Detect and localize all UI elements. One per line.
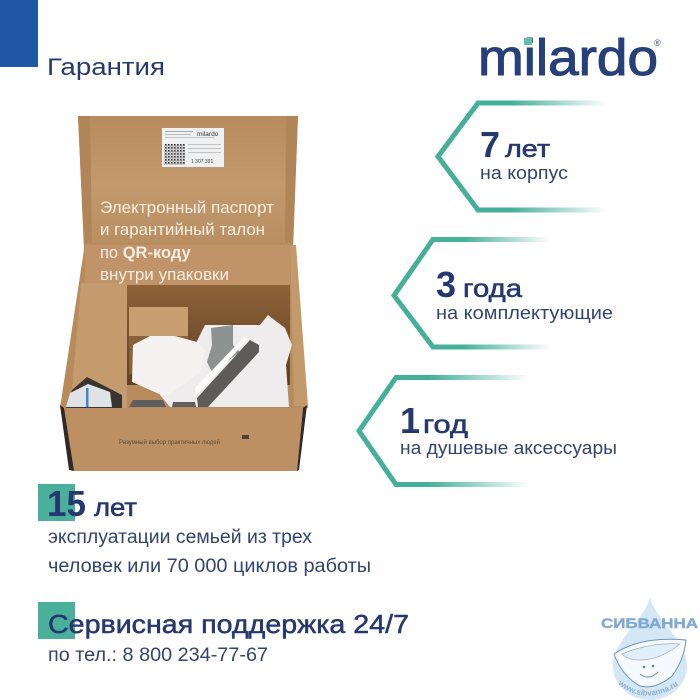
inner folded carton xyxy=(72,283,127,408)
warranty card: 7 years xyxy=(438,103,607,210)
box body xyxy=(60,243,308,471)
box caption: по QR-коду xyxy=(100,244,192,262)
description: на душевые аксессуары xyxy=(400,438,617,458)
description: на комплектующие xyxy=(436,303,613,323)
title: Гарантия xyxy=(47,54,165,81)
box front mark xyxy=(242,435,249,439)
chevron frame xyxy=(438,103,607,210)
watermark logo: Sibvanna xyxy=(601,598,698,700)
phone: по тел.: 8 800 234-77-67 xyxy=(48,645,268,666)
heading: 3 xyxy=(436,264,456,305)
QR label: 1 307 391 xyxy=(191,159,213,165)
heading number: 15 xyxy=(47,483,86,524)
chevron frame xyxy=(394,240,551,347)
white tissue paper xyxy=(160,315,292,407)
brand logo: milardo: milardo xyxy=(478,29,658,86)
box caption xyxy=(100,199,274,284)
brand name: СИБВАННА xyxy=(601,615,698,631)
box front printed text: Разумный выбор практичных людей xyxy=(119,439,220,446)
wrapped item at left xyxy=(66,384,112,407)
teal square xyxy=(38,602,75,639)
registered mark: ® xyxy=(654,38,661,48)
QR label xyxy=(162,128,224,167)
heading: 7 xyxy=(480,124,500,165)
small inner box xyxy=(129,307,188,336)
blue corner block xyxy=(0,0,38,67)
unit: год xyxy=(423,411,469,439)
box front wall xyxy=(63,408,303,471)
box caption: Электронный паспорт xyxy=(100,199,274,217)
warranty card: 3 years xyxy=(394,240,613,347)
teal square xyxy=(38,484,75,521)
unit: лет xyxy=(505,136,550,163)
description: эксплуатации семьей из трех xyxy=(48,527,313,548)
url: www.sibvanna.ru xyxy=(618,680,678,696)
heading: 1 xyxy=(400,400,420,441)
water drop xyxy=(613,597,687,700)
lifetime block: человек или 70 000 циклов работы xyxy=(48,556,371,577)
warranty card: 1 year xyxy=(359,378,617,484)
box lid xyxy=(78,116,298,250)
support block xyxy=(38,602,409,666)
photo: open cardboard box xyxy=(60,116,308,471)
bathtub xyxy=(614,639,686,687)
unit: года xyxy=(463,275,522,303)
description: на корпус xyxy=(480,163,568,183)
logo teal dot xyxy=(524,38,532,45)
box caption: и гарантийный талон xyxy=(100,221,265,239)
QR label: milardo xyxy=(197,131,219,138)
heading: Сервисная поддержка 24/7 xyxy=(48,609,409,639)
faucet in package xyxy=(207,325,240,372)
chevron frame xyxy=(359,378,529,484)
heading unit: лет xyxy=(94,494,138,522)
box caption: внутри упаковки xyxy=(100,266,229,284)
lifetime block xyxy=(38,483,371,577)
